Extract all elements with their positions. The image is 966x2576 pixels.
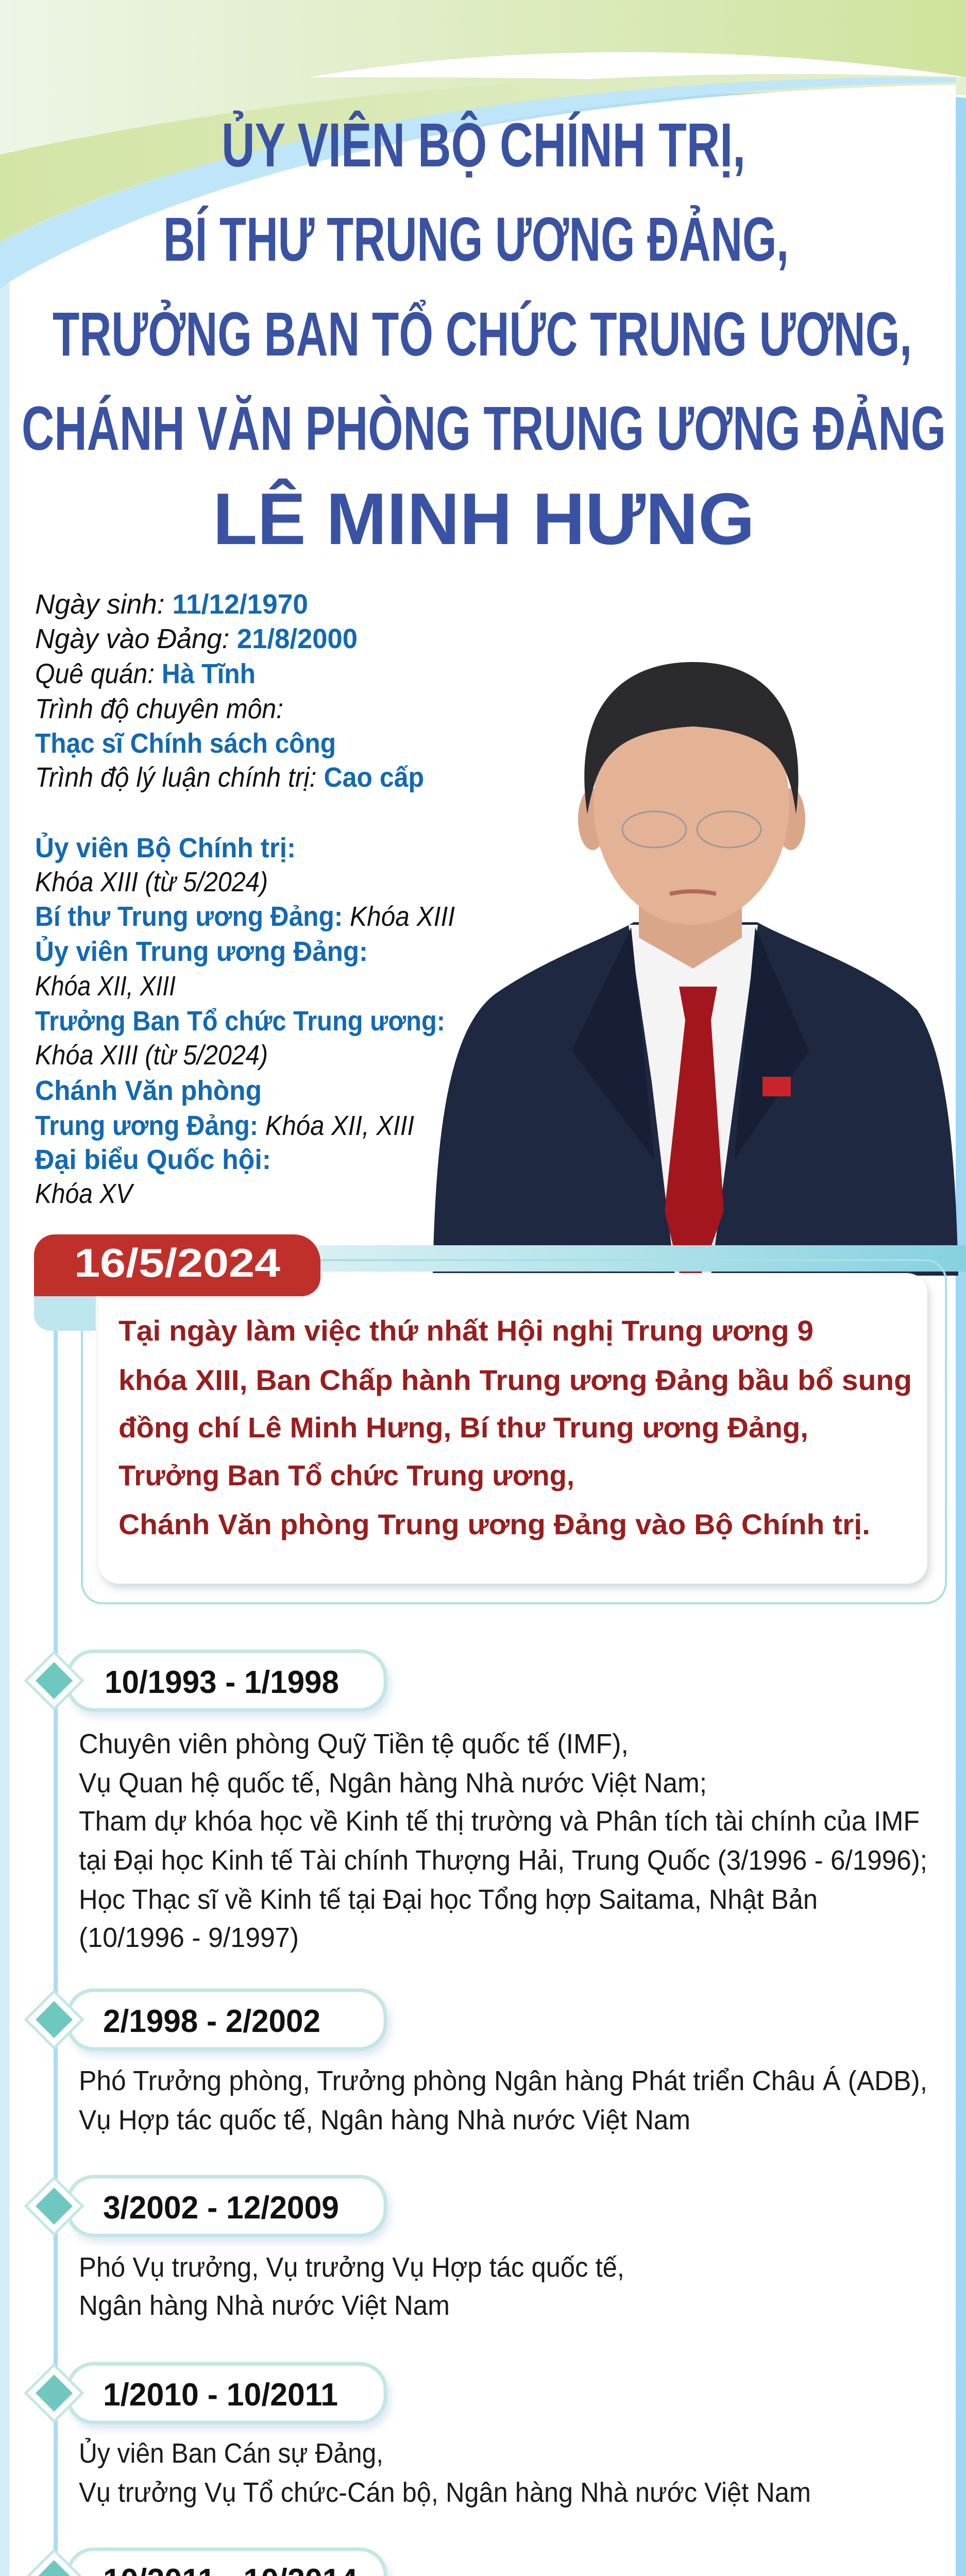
bio text block: Ủy viên Bộ Chính trị: <box>35 833 296 863</box>
timeline item: 2/1998 - 2/2002 <box>26 1990 927 2136</box>
suit <box>433 922 958 1276</box>
highlight panel: 16/5/2024 <box>34 1234 966 1603</box>
bio text block: Bí thư Trung ương Đảng: Khóa XIII <box>35 901 455 932</box>
party badge <box>762 1077 791 1096</box>
bio text block: Đại biểu Quốc hội: <box>35 1144 271 1175</box>
timeline item: 2/1998 - 2/2002: Vụ Hợp tác quốc tế, Ngân hàng Nhà nước Việt Nam <box>79 2105 690 2136</box>
timeline item: 10/1993 - 1/1998: 10/1993 - 1/1998 <box>105 1665 339 1700</box>
timeline item: 10/1993 - 1/1998: Vụ Quan hệ quốc tế, Ngân hàng Nhà nước Việt Nam; <box>79 1768 707 1799</box>
timeline vertical line <box>54 1319 58 2576</box>
bio text block: Trình độ lý luận chính trị: Cao cấp <box>35 762 424 793</box>
bio text block: Ngày vào Đảng: 21/8/2000 <box>35 623 358 654</box>
bio text block: Khóa XV <box>35 1178 134 1209</box>
red statement text: Tại ngày làm việc thứ nhất Hội nghị Trung ương 9 <box>118 1314 814 1347</box>
red statement text: Trưởng Ban Tổ chức Trung ương, <box>118 1459 574 1492</box>
top green header band <box>0 0 966 222</box>
timeline item: 2/1998 - 2/2002: 2/1998 - 2/2002 <box>103 2004 320 2039</box>
bio text block: Trung ương Đảng: Khóa XII, XIII <box>35 1110 414 1141</box>
bio text block: Khóa XIII (từ 5/2024) <box>35 867 268 897</box>
timeline item: 3/2002 - 12/2009: Phó Vụ trưởng, Vụ trưởng Vụ Hợp tác quốc tế, <box>79 2252 624 2283</box>
timeline item: 10/1993 - 1/1998: Chuyên viên phòng Quỹ Tiền tệ quốc tế (IMF), <box>79 1728 629 1759</box>
timeline item: 1/2010 - 10/2011: Vụ trưởng Vụ Tổ chức-Cán bộ, Ngân hàng Nhà nước Việt Nam <box>79 2477 811 2508</box>
bio text block: Trình độ chuyên môn: <box>35 693 283 724</box>
red statement text: khóa XIII, Ban Chấp hành Trung ương Đảng bầu bổ sung <box>118 1364 912 1396</box>
bio text block: Khóa XIII (từ 5/2024) <box>35 1040 268 1071</box>
tie <box>665 987 724 1276</box>
bio text block: Khóa XII, XIII <box>35 971 176 1002</box>
fold tail <box>34 1288 96 1331</box>
bio text block: Trưởng Ban Tổ chức Trung ương: <box>35 1006 445 1037</box>
timeline item: 3/2002 - 12/2009: Ngân hàng Nhà nước Việt Nam <box>79 2290 450 2321</box>
bio text block: Ủy viên Trung ương Đảng: <box>35 936 368 967</box>
timeline item: 1/2010 - 10/2011 <box>26 2364 811 2508</box>
timeline item: 3/2002 - 12/2009 <box>26 2177 624 2321</box>
red statement text <box>118 1314 912 1540</box>
red statement text: đồng chí Lê Minh Hưng, Bí thư Trung ương Đảng, <box>118 1411 808 1444</box>
bio text block: Thạc sĩ Chính sách công <box>35 728 336 759</box>
hair <box>584 662 799 814</box>
timeline item: 10/1993 - 1/1998: Học Thạc sĩ về Kinh tế tại Đại học Tổng hợp Saitama, Nhật Bản <box>79 1884 818 1915</box>
timeline item: 10/2011 - 10/2014 <box>26 2549 638 2576</box>
timeline item: 2/1998 - 2/2002: Phó Trưởng phòng, Trưởng phòng Ngân hàng Phát triển Châu Á (ADB), <box>79 2065 927 2096</box>
bio text block <box>35 589 455 1209</box>
red statement text: Chánh Văn phòng Trung ương Đảng vào Bộ Chính trị. <box>118 1508 870 1540</box>
bio text block: Chánh Văn phòng <box>35 1075 262 1106</box>
timeline item: 10/1993 - 1/1998: (10/1996 - 9/1997) <box>79 1922 299 1953</box>
timeline item: 10/1993 - 1/1998: tại Đại học Kinh tế Tài chính Thượng Hải, Trung Quốc (3/1996 - 6/1996); <box>79 1845 927 1876</box>
neck <box>639 871 742 969</box>
white card <box>98 1273 927 1584</box>
ears <box>578 788 607 850</box>
timeline item: 1/2010 - 10/2011: Ủy viên Ban Cán sự Đảng, <box>79 2438 383 2469</box>
face <box>594 683 789 925</box>
shirt <box>629 925 758 1276</box>
bio text block: Ngày sinh: 11/12/1970 <box>35 589 308 620</box>
outline frame <box>82 1260 946 1603</box>
mouth <box>670 891 716 894</box>
timeline item: 10/1993 - 1/1998: Tham dự khóa học về Kinh tế thị trường và Phân tích tài chính của IMF <box>79 1806 920 1837</box>
title <box>22 110 946 560</box>
timeline item: 3/2002 - 12/2009: 3/2002 - 12/2009 <box>103 2190 339 2226</box>
red date tab <box>34 1234 320 1296</box>
glasses <box>622 811 761 848</box>
teal strip <box>309 1245 966 1272</box>
timeline item: 10/1993 - 1/1998 <box>26 1651 927 1953</box>
portrait photo <box>433 662 958 1276</box>
title: ỦY VIÊN BỘ CHÍNH TRỊ, <box>222 110 745 180</box>
bio text block: Quê quán: Hà Tĩnh <box>35 658 256 689</box>
lapels <box>572 927 654 1159</box>
timeline item: 1/2010 - 10/2011: 1/2010 - 10/2011 <box>103 2377 338 2413</box>
tab date text: 16/5/2024 <box>74 1240 280 1285</box>
title: LÊ MINH HƯNG <box>213 478 755 560</box>
